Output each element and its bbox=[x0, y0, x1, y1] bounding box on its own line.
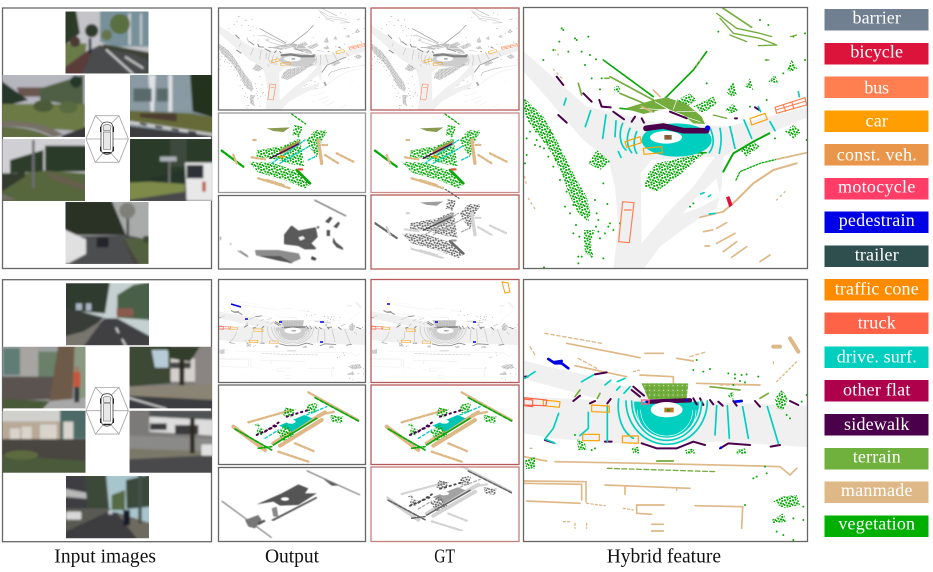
legend item: other flat: other flat bbox=[843, 380, 910, 400]
caption: Hybrid feature: Hybrid feature bbox=[607, 546, 721, 567]
photo: front camera bbox=[63, 282, 151, 347]
legend item: barrier: barrier bbox=[853, 8, 901, 28]
photo: front-left camera bbox=[0, 73, 87, 138]
legend item: motocycle: motocycle bbox=[838, 176, 915, 196]
legend: semantic classes bbox=[824, 8, 928, 537]
legend item: const. veh.: const. veh. bbox=[837, 145, 917, 165]
caption: Input images: Input images bbox=[54, 546, 156, 567]
panel: GT, scene 2 feature map bbox=[371, 466, 519, 542]
legend item: barrier bbox=[824, 8, 928, 30]
photo: front-right camera bbox=[128, 73, 213, 138]
legend item: traffic cone: traffic cone bbox=[835, 279, 919, 299]
photo: rear-left camera bbox=[0, 409, 87, 474]
legend item: trailer bbox=[824, 245, 928, 267]
photo: front-left camera bbox=[0, 345, 87, 410]
point cloud: semantic points bbox=[524, 333, 807, 540]
legend item: bicycle: bicycle bbox=[850, 41, 903, 61]
legend item: bus: bus bbox=[864, 77, 889, 97]
panel: GT, scene 1 feature map bbox=[371, 189, 519, 269]
icon: car with camera fields bbox=[86, 116, 128, 162]
panel: output, scene 1 feature map bbox=[218, 196, 366, 269]
panel: output, scene 2 3D semantic view bbox=[218, 385, 366, 464]
legend item: vegetation bbox=[824, 513, 928, 537]
photo: rear-left camera bbox=[0, 137, 87, 203]
legend item: bus bbox=[824, 76, 928, 98]
legend item: pedestrain bbox=[824, 210, 928, 233]
legend item: sidewalk bbox=[824, 414, 928, 436]
map: road surface bbox=[524, 361, 807, 447]
legend item: drive. surf.: drive. surf. bbox=[837, 346, 917, 366]
bounding boxes: cars and truck bbox=[524, 398, 638, 443]
legend item: motocycle bbox=[824, 176, 928, 200]
photo: rear camera bbox=[63, 201, 151, 266]
panel: output, scene 2 top view bbox=[218, 280, 366, 382]
photo: front camera bbox=[63, 10, 151, 75]
legend item: other flat bbox=[824, 380, 928, 402]
panel: hybrid feature, scene 1 bbox=[524, 7, 808, 269]
panel: GT, scene 2 top view bbox=[371, 280, 519, 382]
caption: Output: Output bbox=[265, 546, 320, 567]
panel: input images, scene 2 bbox=[0, 280, 213, 542]
photo: front-right camera bbox=[128, 345, 213, 410]
legend item: manmade bbox=[824, 480, 928, 503]
panel: hybrid feature, scene 2 bbox=[524, 280, 808, 542]
photo: rear camera bbox=[63, 474, 151, 540]
legend item: terrain: terrain bbox=[853, 447, 901, 467]
legend item: vegetation: vegetation bbox=[838, 513, 915, 533]
legend item: truck: truck bbox=[858, 312, 896, 332]
panel: GT, scene 2 3D semantic view bbox=[371, 385, 519, 464]
photo: rear-right camera bbox=[128, 409, 213, 474]
point cloud: semantic points bbox=[524, 7, 807, 267]
legend item: car: car bbox=[866, 111, 888, 131]
legend item: car bbox=[824, 110, 928, 132]
panel: GT, scene 1 3D semantic view bbox=[371, 113, 519, 192]
legend item: terrain bbox=[824, 447, 928, 470]
photo: rear-right camera bbox=[128, 137, 213, 202]
panel: GT, scene 1 top view bbox=[371, 8, 519, 110]
legend item: bicycle bbox=[824, 41, 928, 64]
panel: output, scene 1 top view bbox=[218, 8, 366, 110]
panel: output, scene 1 3D semantic view bbox=[218, 113, 366, 192]
panel: input images, scene 1 bbox=[0, 8, 213, 268]
map: road surface bbox=[524, 52, 807, 269]
panel: output, scene 2 feature map bbox=[218, 468, 366, 542]
legend item: manmade: manmade bbox=[841, 480, 913, 500]
legend item: truck bbox=[824, 312, 928, 334]
legend item: sidewalk: sidewalk bbox=[844, 414, 909, 434]
caption: GT: GT bbox=[434, 546, 455, 567]
legend item: pedestrain: pedestrain bbox=[839, 210, 915, 230]
bounding boxes: cars, bus and truck bbox=[619, 98, 807, 243]
legend item: trailer: trailer bbox=[855, 245, 899, 265]
icon: car with camera fields bbox=[86, 387, 128, 434]
